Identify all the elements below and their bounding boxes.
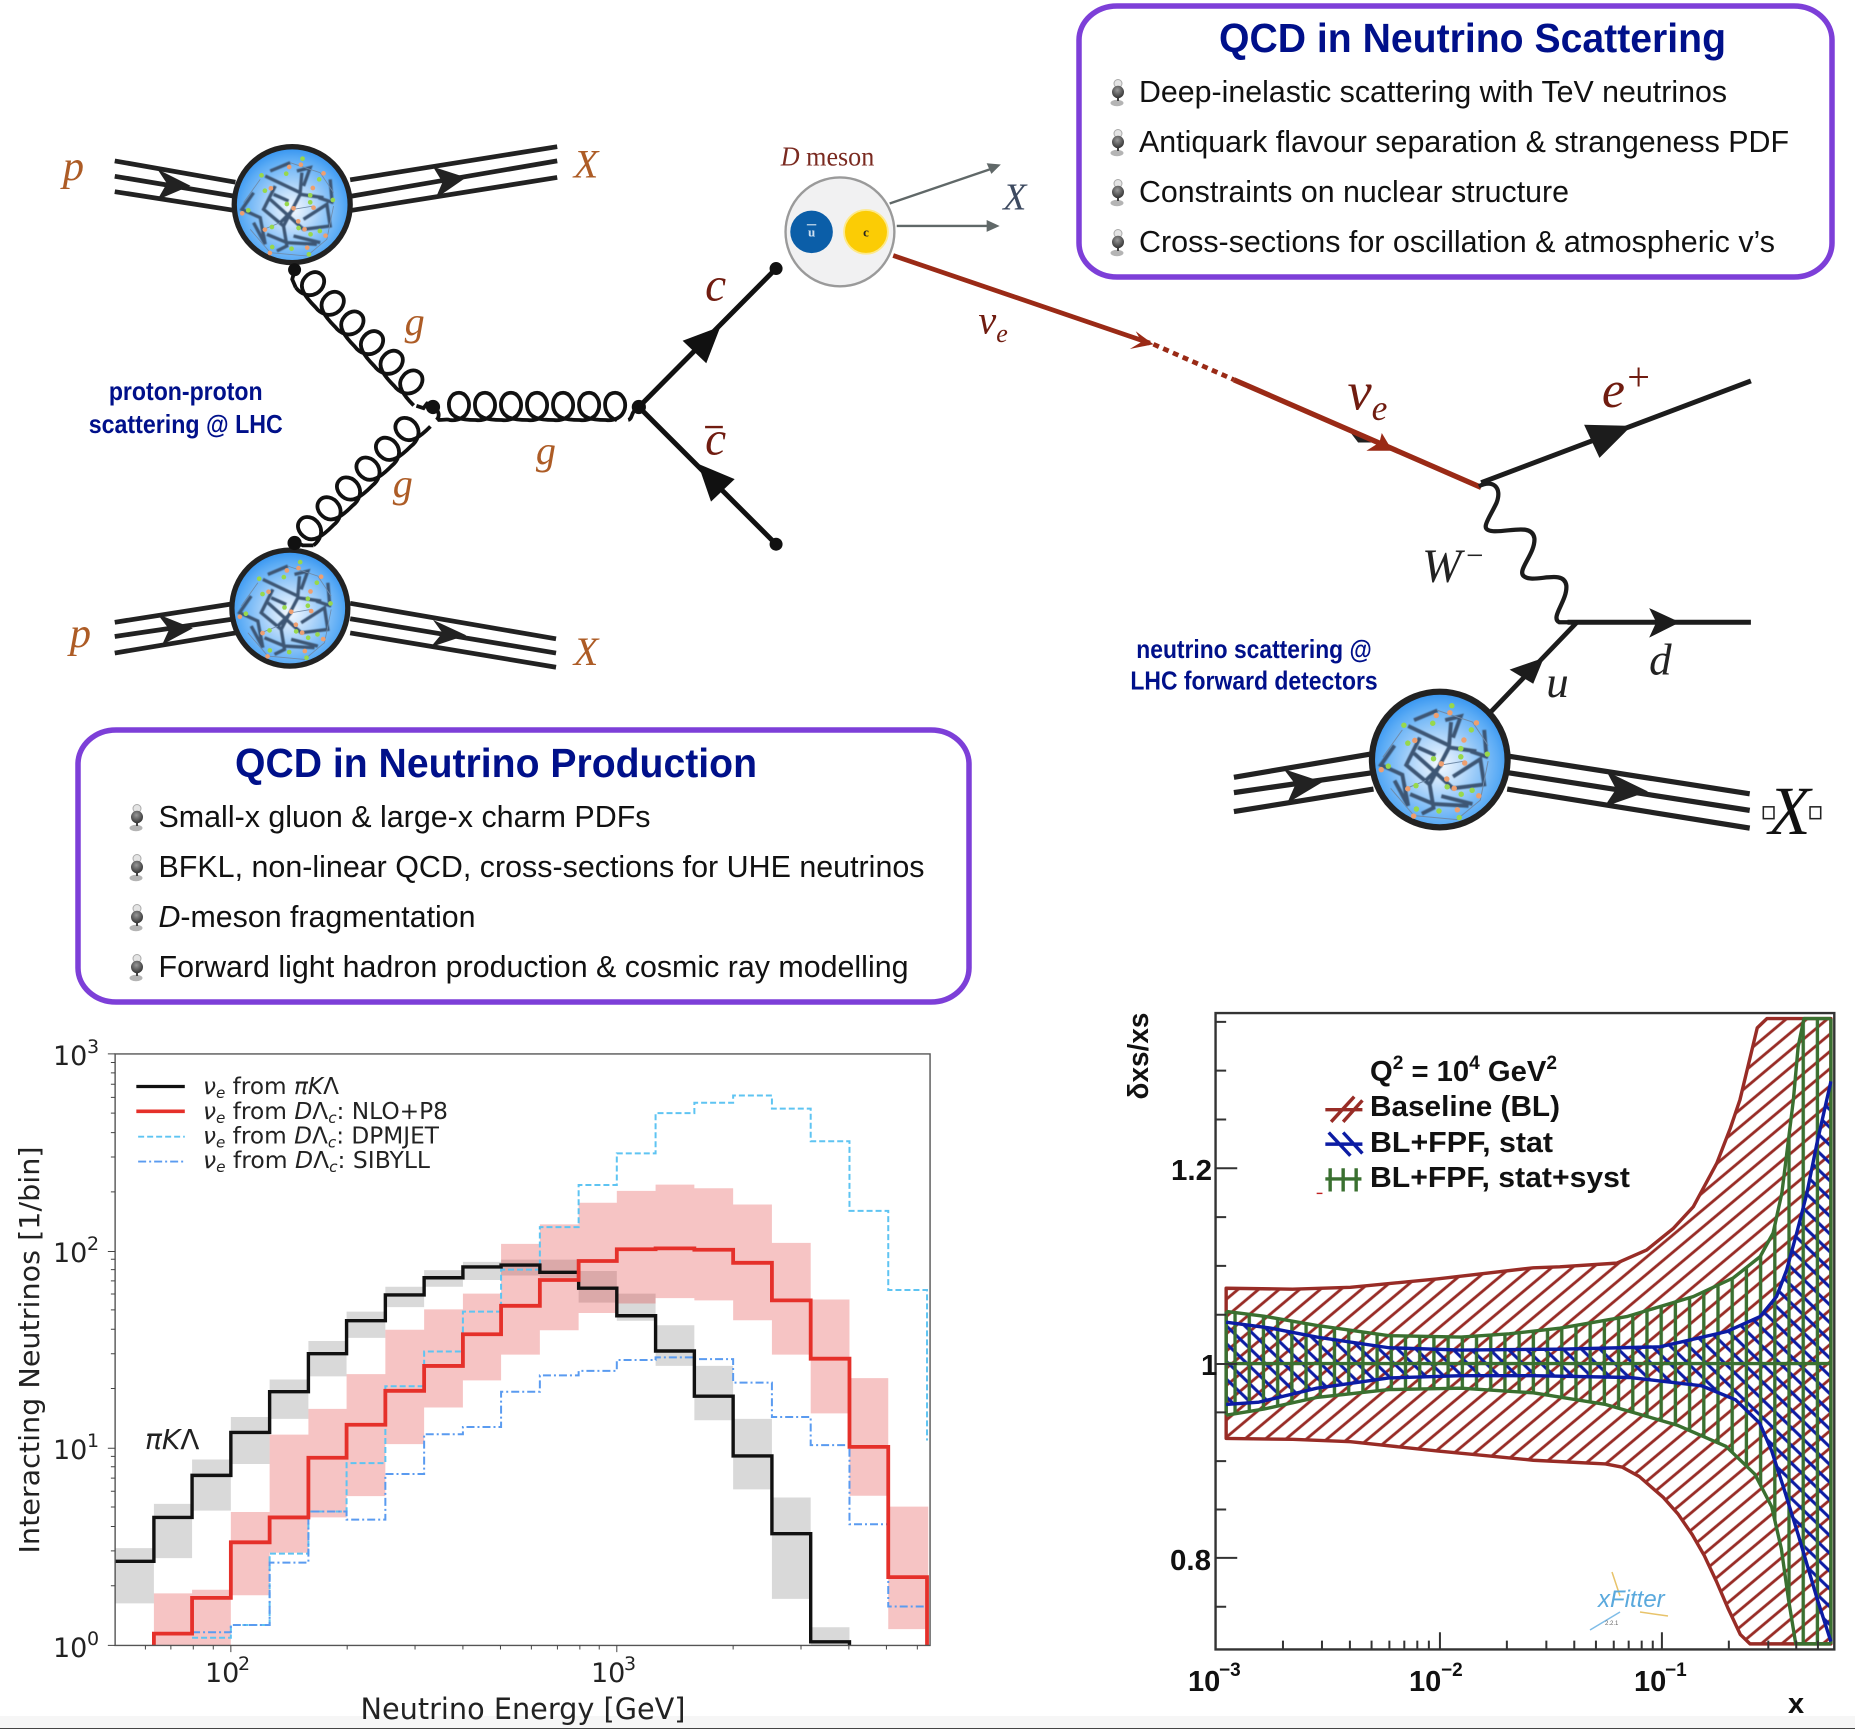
legend text: c [329, 1158, 338, 1176]
legend text: : NLO+P8 [337, 1099, 448, 1125]
label e+: e [1602, 362, 1625, 419]
y axis tick labels [53, 1036, 99, 1664]
bullet 3: D-meson fragmentation [158, 899, 476, 934]
icon: D meson with quarks: c [863, 225, 869, 240]
legend text: BL+FPF, stat+syst [1370, 1162, 1630, 1194]
annotation piKLambda: πKΛ [145, 1423, 199, 1456]
label p bottom: p [67, 610, 91, 657]
icon: top proton [234, 147, 350, 263]
legend text: = 10 [1403, 1056, 1469, 1088]
u quark line and arrow [1488, 622, 1577, 715]
x axis tick labels: 2 [238, 1653, 250, 1675]
label c: c [705, 259, 726, 311]
y axis tick labels: 1.2 [1171, 1155, 1212, 1187]
label g lower: g [393, 461, 413, 506]
positron line and arrow [1481, 381, 1751, 483]
x axis title: x [1788, 1688, 1804, 1720]
anti-charm quark line and arrow [639, 407, 776, 544]
bullet 3: Constraints on nuclear structure [1139, 174, 1569, 209]
legend text: c [328, 1109, 337, 1127]
panel: QCD in Neutrino Production [78, 730, 969, 1002]
legend text: DΛ [295, 1148, 329, 1174]
label nu_e first: e [996, 319, 1008, 348]
y axis tick labels: 10 [53, 1238, 87, 1269]
x axis tick labels [1188, 1660, 1687, 1698]
x axis tick labels: 10 [205, 1658, 239, 1689]
Feynman diagram: proton-proton scattering producing D meson [60, 141, 1821, 849]
bullet 2: BFKL, non-linear QCD, cross-sections for UHE neutrinos [158, 849, 924, 884]
label u: u [1546, 657, 1569, 707]
neutrino line with arrow and dotted propagation [893, 256, 1481, 487]
legend text: from [226, 1148, 295, 1174]
x axis tick labels: 10 [1188, 1666, 1220, 1698]
W boson wavy line [1479, 484, 1573, 622]
incoming proton p lines, top [115, 147, 557, 211]
y axis tick labels: 10 [53, 1633, 87, 1664]
y axis tick labels [1170, 1155, 1217, 1577]
text: proton-proton scattering @ LHC [89, 376, 283, 439]
legend text: 2 [1546, 1053, 1557, 1074]
plot area with hatched bands [1216, 1013, 1834, 1649]
label X top: X [572, 141, 600, 186]
vertices [287, 262, 783, 551]
d quark line and arrow [1568, 608, 1751, 638]
x axis tick labels: −2 [1441, 1660, 1463, 1681]
legend text: Baseline (BL) [1370, 1091, 1560, 1123]
arrows: D meson decay to X [890, 163, 1001, 232]
y axis tick labels: 3 [87, 1036, 99, 1058]
logo: xFitter: 2.2.1 [1605, 1621, 1619, 1627]
label nu_e second: ν [1347, 361, 1372, 421]
legend text: DΛ [294, 1124, 328, 1150]
x axis tick labels: 3 [624, 1653, 636, 1675]
gluon lines [292, 268, 638, 546]
x axis tick labels: −3 [1219, 1660, 1241, 1681]
legend text: e [216, 1134, 225, 1152]
x axis title: Neutrino Energy [GeV] [360, 1692, 686, 1726]
y axis tick labels: 0 [87, 1628, 99, 1650]
label nu_e first: ν [978, 298, 996, 343]
x axis tick labels [205, 1653, 636, 1689]
legend text: 4 [1469, 1053, 1480, 1074]
legend text: c [328, 1134, 337, 1152]
label g middle: g [536, 428, 556, 473]
heading: QCD in Neutrino Scattering [1219, 15, 1726, 61]
text: neutrino scattering @ LHC forward detectors: neutrino scattering @ [1136, 634, 1372, 664]
legend text: ν [203, 1074, 216, 1100]
incoming proton p lines, bottom [115, 603, 556, 667]
icon: target proton [1372, 692, 1508, 827]
chart: cross-section uncertainty ratio [1123, 1012, 1834, 1720]
icon: D meson with quarks [786, 177, 894, 286]
x axis tick labels: 10 [1634, 1666, 1666, 1698]
charm quark line and arrow [639, 269, 776, 407]
heading: QCD in Neutrino Production [235, 740, 757, 786]
label c bar: c [705, 413, 726, 465]
legend text: from [225, 1099, 294, 1125]
y axis tick labels: 0.8 [1170, 1545, 1211, 1577]
label W minus: − [1466, 538, 1484, 572]
bullet 1: Small-x gluon & large-x charm PDFs [158, 799, 650, 834]
legend text: GeV [1480, 1056, 1547, 1088]
label X decay: X [1001, 176, 1028, 218]
legend text: from [225, 1074, 294, 1100]
label d: d [1649, 634, 1672, 684]
label g upper: g [405, 299, 425, 344]
bullet 1: Deep-inelastic scattering with TeV neutrinos [1139, 74, 1727, 109]
y axis tick labels: 1 [1201, 1350, 1217, 1382]
bullet 2: Antiquark flavour separation & strangeness PDF [1139, 124, 1789, 159]
text: proton-proton scattering @ LHC: scattering @ LHC [89, 409, 283, 439]
target proton lines [1234, 754, 1750, 828]
y axis tick labels: 10 [53, 1435, 87, 1466]
legend text: ν [203, 1099, 216, 1125]
bullet 4: Forward light hadron production & cosmic ray modelling [158, 949, 908, 984]
y axis tick labels: 2 [87, 1233, 99, 1255]
label X with missing glyph boxes: X [1766, 773, 1814, 849]
panel: QCD in Neutrino Scattering [1079, 6, 1832, 277]
window bottom edge [0, 1716, 1855, 1729]
y axis title: δxs/xs [1123, 1012, 1155, 1100]
y axis tick labels: 1 [87, 1430, 99, 1452]
x axis tick labels: 10 [591, 1658, 625, 1689]
label p top: p [60, 143, 84, 190]
x axis tick labels: 10 [1409, 1666, 1441, 1698]
legend text: DΛ [294, 1099, 328, 1125]
label X bottom: X [572, 629, 600, 674]
legend text: Q [1370, 1056, 1393, 1088]
legend text [203, 1074, 448, 1176]
legend text: πKΛ [294, 1074, 339, 1100]
label W minus: W [1422, 541, 1461, 593]
histogram plot area [108, 1054, 930, 1652]
legend text: : DPMJET [336, 1124, 440, 1150]
legend text [1370, 1053, 1630, 1194]
logo: xFitter: xFitter [1597, 1586, 1666, 1613]
legend text: : SIBYLL [338, 1148, 430, 1174]
legend text: e [216, 1084, 225, 1102]
legend text: ν [203, 1148, 216, 1174]
label e+: + [1627, 354, 1650, 399]
chart: interacting neutrinos histogram [13, 1036, 930, 1726]
D meson label: D meson [780, 142, 875, 172]
icon: bottom proton [232, 550, 348, 666]
legend text: from [225, 1124, 294, 1150]
logo: xFitter [1590, 1572, 1668, 1630]
label nu_e second: e [1372, 388, 1387, 428]
text: proton-proton scattering @ LHC: proton-proton [109, 376, 263, 406]
icon: D meson with quarks: u [808, 225, 815, 240]
legend text: ν [203, 1124, 216, 1150]
x axis tick labels: −1 [1665, 1660, 1687, 1681]
legend text: e [216, 1158, 226, 1176]
legend text: e [216, 1109, 225, 1127]
y axis tick labels: 10 [53, 1041, 87, 1072]
legend text: 2 [1393, 1053, 1403, 1074]
text: neutrino scattering @ LHC forward detectors [1130, 634, 1378, 696]
text: neutrino scattering @ LHC forward detectors: LHC forward detectors [1130, 666, 1378, 696]
legend text: BL+FPF, stat [1370, 1127, 1553, 1159]
y axis title: Interacting Neutrinos [1/bin] [13, 1146, 46, 1554]
bullet 4: Cross-sections for oscillation & atmospheric v’s [1139, 224, 1775, 259]
